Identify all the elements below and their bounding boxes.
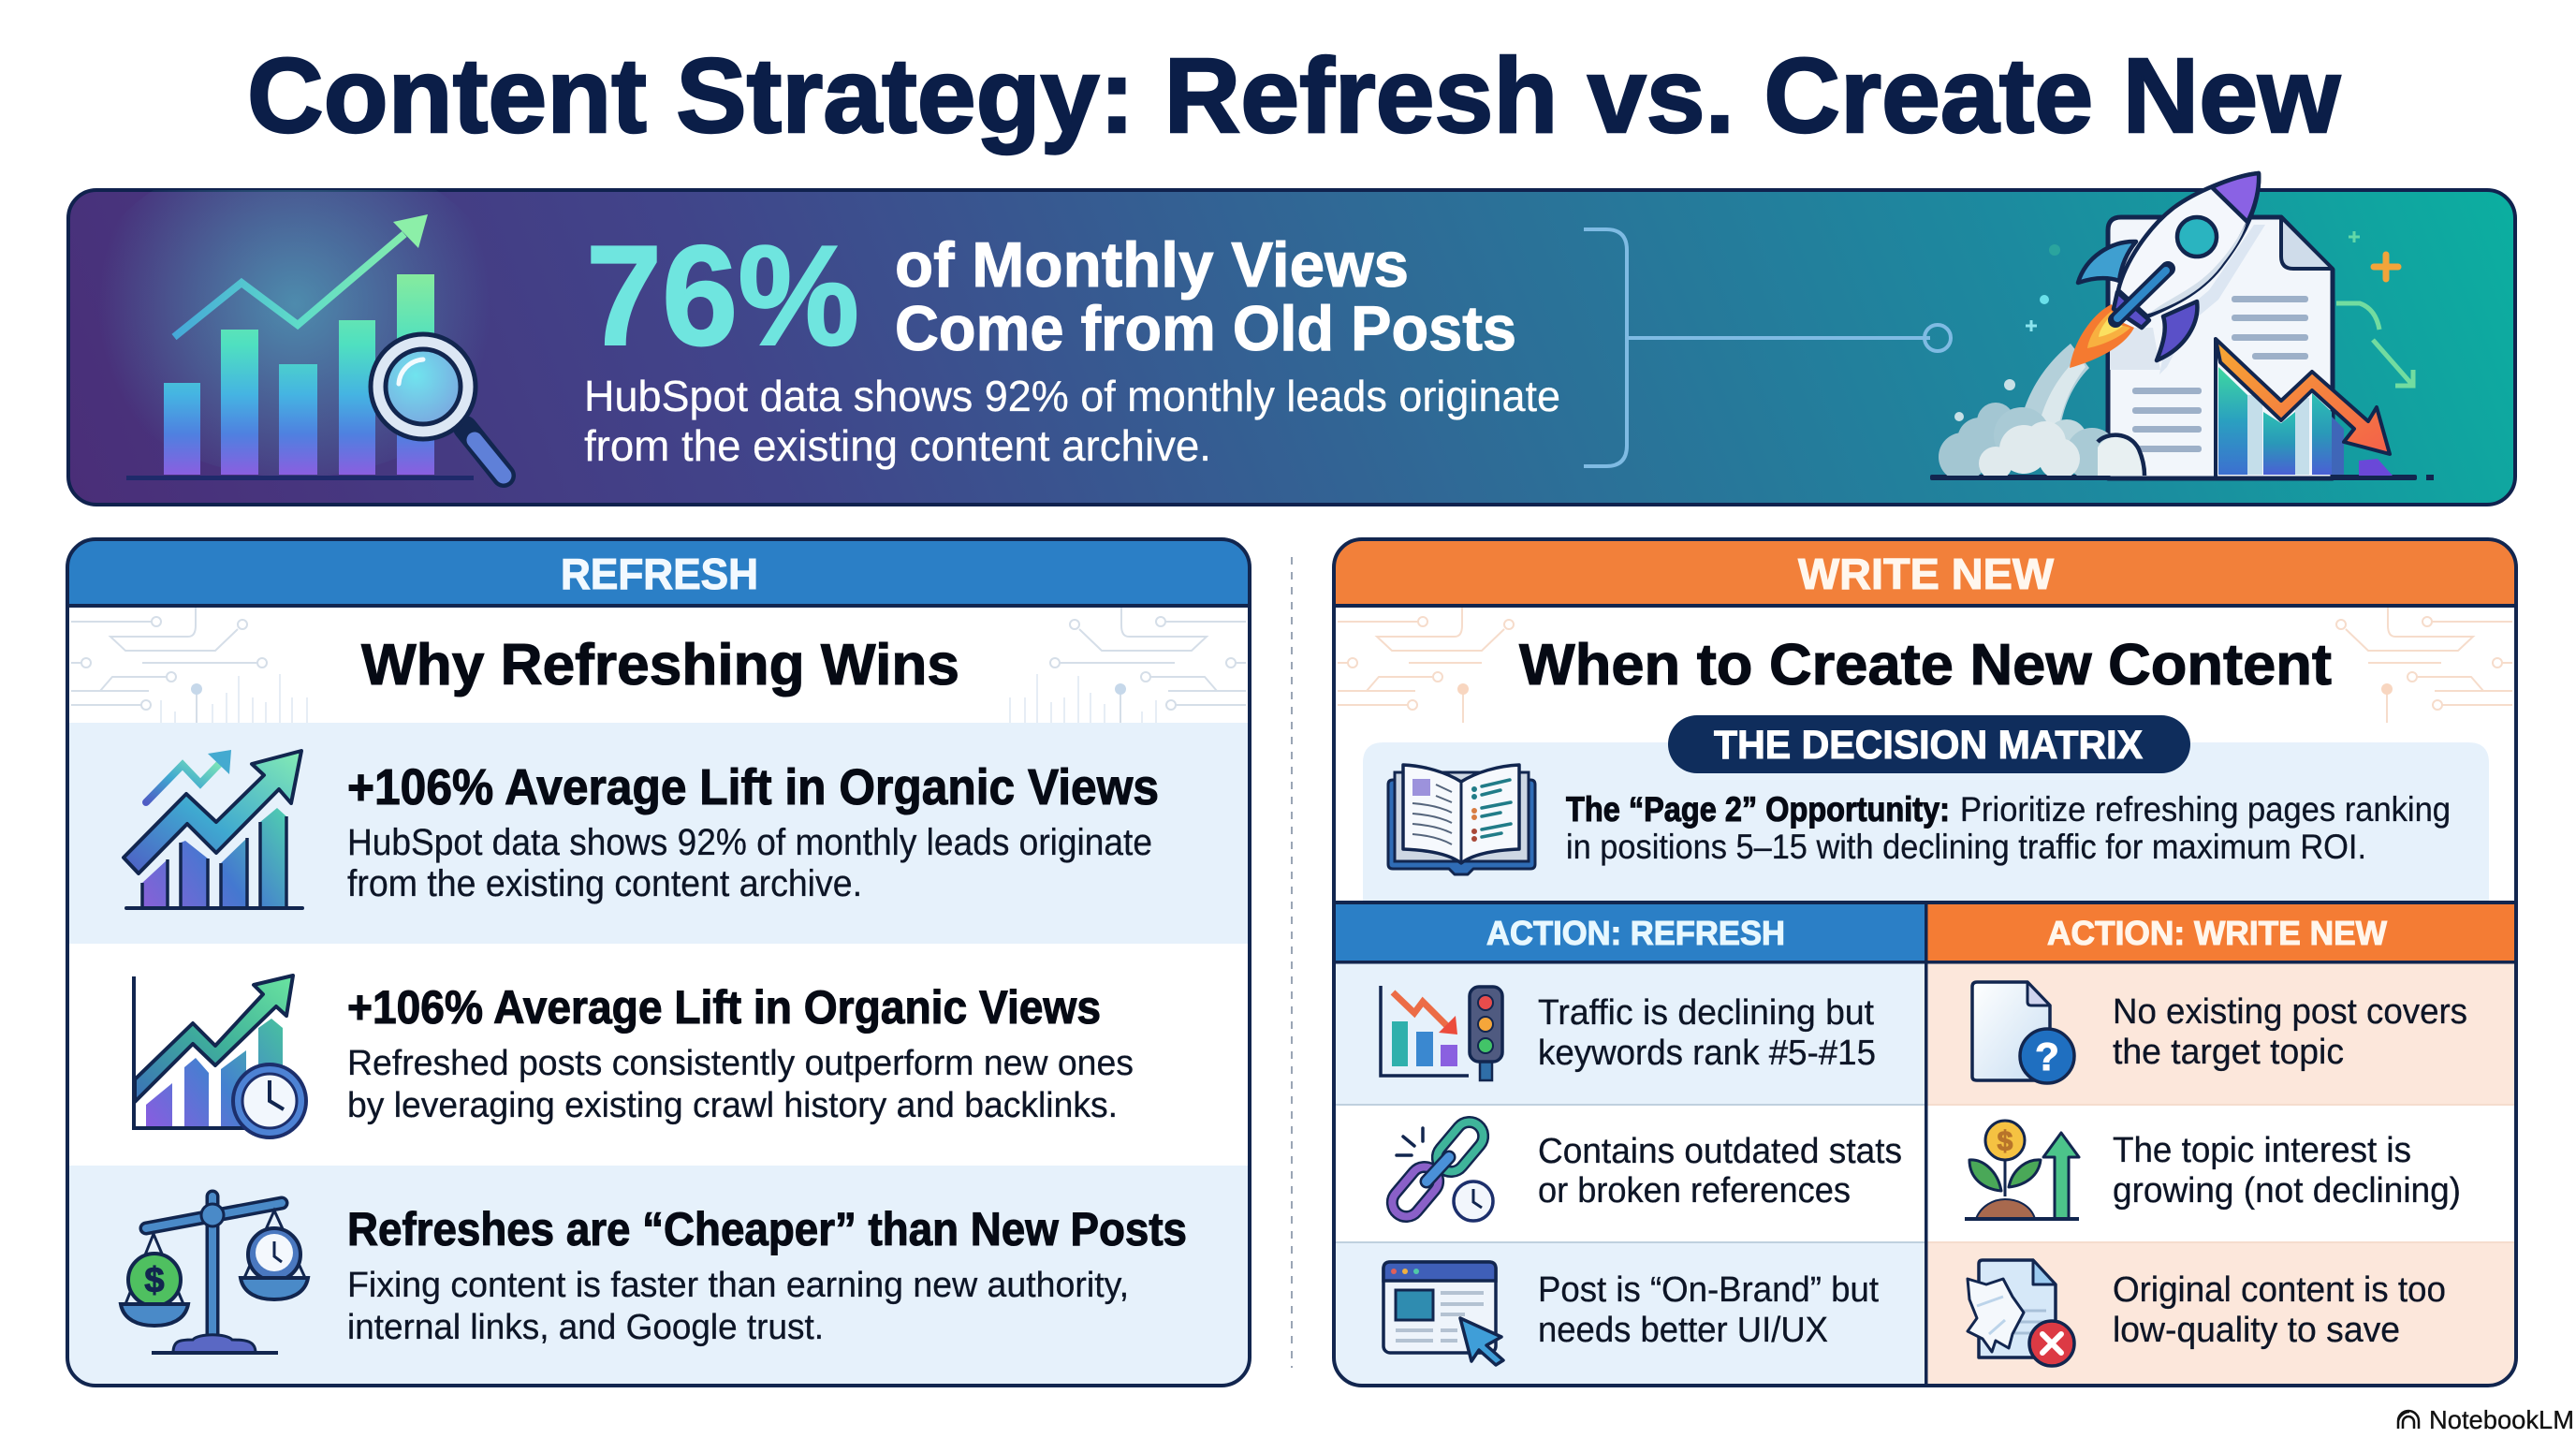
heading: of monthly views: of Monthly Views — [895, 229, 1409, 301]
icon: money plant with growth arrow — [1965, 1121, 2079, 1219]
matrix column: action refresh — [1334, 902, 1926, 1386]
connector bracket — [1584, 229, 1951, 466]
icon: web page with cursor — [1383, 1262, 1503, 1365]
text: no existing post — [2113, 992, 2467, 1072]
row 1: average lift — [67, 723, 1250, 944]
text: row 3 — [347, 1203, 1187, 1347]
text: outdated stats: Contains outdated stats — [1538, 1132, 1902, 1171]
row 2: refreshed posts — [132, 974, 1133, 1139]
text: outdated stats — [1538, 1132, 1902, 1211]
text: topic interest: The topic interest is — [2113, 1131, 2411, 1170]
heading: when to create new content: When to Create New Content — [1519, 633, 2332, 697]
title: Content Strategy: Refresh vs. Create New — [247, 37, 2341, 154]
icon: declining chart and traffic light — [1381, 986, 1502, 1080]
text: page 2 opportunity: The “Page 2” Opportunity: — [1566, 790, 1950, 829]
header bar: write new: WRITE NEW — [1798, 550, 2055, 598]
text: hero description: HubSpot data shows 92% of monthly leads originate — [584, 372, 1560, 420]
text: row 2: Refreshed posts consistently outperform new ones — [347, 1044, 1134, 1083]
text: topic interest: growing (not declining) — [2113, 1171, 2461, 1211]
icon: crumpled document with x — [1968, 1260, 2074, 1366]
header bar: refresh: REFRESH — [561, 550, 758, 598]
text: outdated stats: or broken references — [1538, 1171, 1851, 1211]
rocket smoke trail — [2022, 344, 2089, 435]
watermark: notebooklm: NotebookLM — [2429, 1405, 2574, 1434]
row 3: cheaper — [67, 1166, 1250, 1386]
panel: refresh — [67, 539, 1250, 1386]
stat: 76%: 76% — [586, 216, 859, 375]
text: on-brand: needs better UI/UX — [1538, 1311, 1828, 1350]
matrix column: action write new — [1926, 902, 2516, 1386]
icon: chart with clock — [134, 976, 306, 1137]
header bar: write new — [1334, 539, 2516, 608]
icon: growth bar chart with magnifier — [126, 214, 504, 480]
icon: open book — [1388, 765, 1535, 874]
icon: balance scale — [121, 1196, 308, 1353]
icon: money plant with growth arrow: $ — [1998, 1126, 2013, 1157]
column header: action refresh — [1334, 902, 1926, 962]
text: page 2 opportunity — [1566, 790, 2451, 866]
text: hero description: from the existing content archive. — [584, 421, 1211, 470]
rocket — [2070, 173, 2259, 368]
text: row 1 — [347, 759, 1159, 904]
icon: broken chain with clock — [1386, 1116, 1493, 1223]
icon: document with question mark: ? — [2035, 1034, 2059, 1078]
header bar: refresh — [67, 539, 1250, 608]
text: row 2: by leveraging existing crawl history and backlinks. — [347, 1086, 1118, 1125]
panel: write new — [1334, 539, 2516, 1386]
text: traffic declining — [1538, 993, 1876, 1073]
text: original content: low-quality to save — [2113, 1311, 2400, 1350]
text: topic interest — [2113, 1131, 2461, 1211]
text: page 2 opportunity: in positions 5–15 with declining traffic for maximum ROI. — [1566, 828, 2366, 866]
pill: the decision matrix: THE DECISION MATRIX — [1714, 723, 2143, 768]
column header: action write new — [1926, 902, 2516, 962]
column header: action refresh: ACTION: REFRESH — [1486, 914, 1785, 952]
heading: of monthly views: Come from Old Posts — [895, 293, 1516, 364]
heading: of monthly views — [895, 229, 1516, 364]
text: hero description — [584, 372, 1560, 470]
text: row 1: +106% Average Lift in Organic Views — [347, 759, 1159, 815]
text: traffic declining: Traffic is declining but — [1538, 993, 1874, 1033]
text: row 2 — [347, 981, 1134, 1125]
cloud — [1939, 403, 2144, 481]
text: row 2: +106% Average Lift in Organic Views — [347, 981, 1101, 1034]
icon: growth arrows chart — [124, 750, 302, 908]
text: on-brand: Post is “On-Brand” but — [1538, 1270, 1879, 1310]
panel: hero banner — [68, 150, 2515, 505]
text: no existing post: the target topic — [2113, 1033, 2344, 1072]
icon: document with question mark — [1972, 982, 2074, 1083]
icon: rocket launching from document with falling chart — [1930, 173, 2434, 481]
heading: why refreshing wins: Why Refreshing Wins — [361, 633, 959, 697]
text: on-brand — [1538, 1270, 1879, 1350]
callout: page 2 opportunity — [1363, 742, 2489, 902]
text: original content: Original content is too — [2113, 1270, 2446, 1310]
text: row 3: internal links, and Google trust. — [347, 1308, 824, 1347]
text: row 1: from the existing content archive. — [347, 863, 862, 904]
text: row 3: Fixing content is faster than earning new authority, — [347, 1266, 1129, 1305]
text: traffic declining: keywords rank #5-#15 — [1538, 1034, 1876, 1073]
text: row 1: HubSpot data shows 92% of monthly leads originate — [347, 822, 1152, 863]
circuit decoration — [1338, 608, 2512, 723]
text: no existing post: No existing post covers — [2113, 992, 2467, 1032]
column header: action write new: ACTION: WRITE NEW — [2047, 914, 2387, 952]
sparkles — [1954, 231, 2413, 421]
text: row 3: Refreshes are “Cheaper” than New Posts — [347, 1203, 1187, 1255]
icon: balance scale: $ — [144, 1261, 165, 1300]
text: original content — [2113, 1270, 2446, 1350]
text: page 2 opportunity: Prioritize refreshing pages ranking — [1960, 790, 2451, 829]
circuit decoration — [71, 608, 1246, 723]
dashed divider — [1291, 557, 1293, 1368]
pill: the decision matrix — [1668, 715, 2190, 773]
